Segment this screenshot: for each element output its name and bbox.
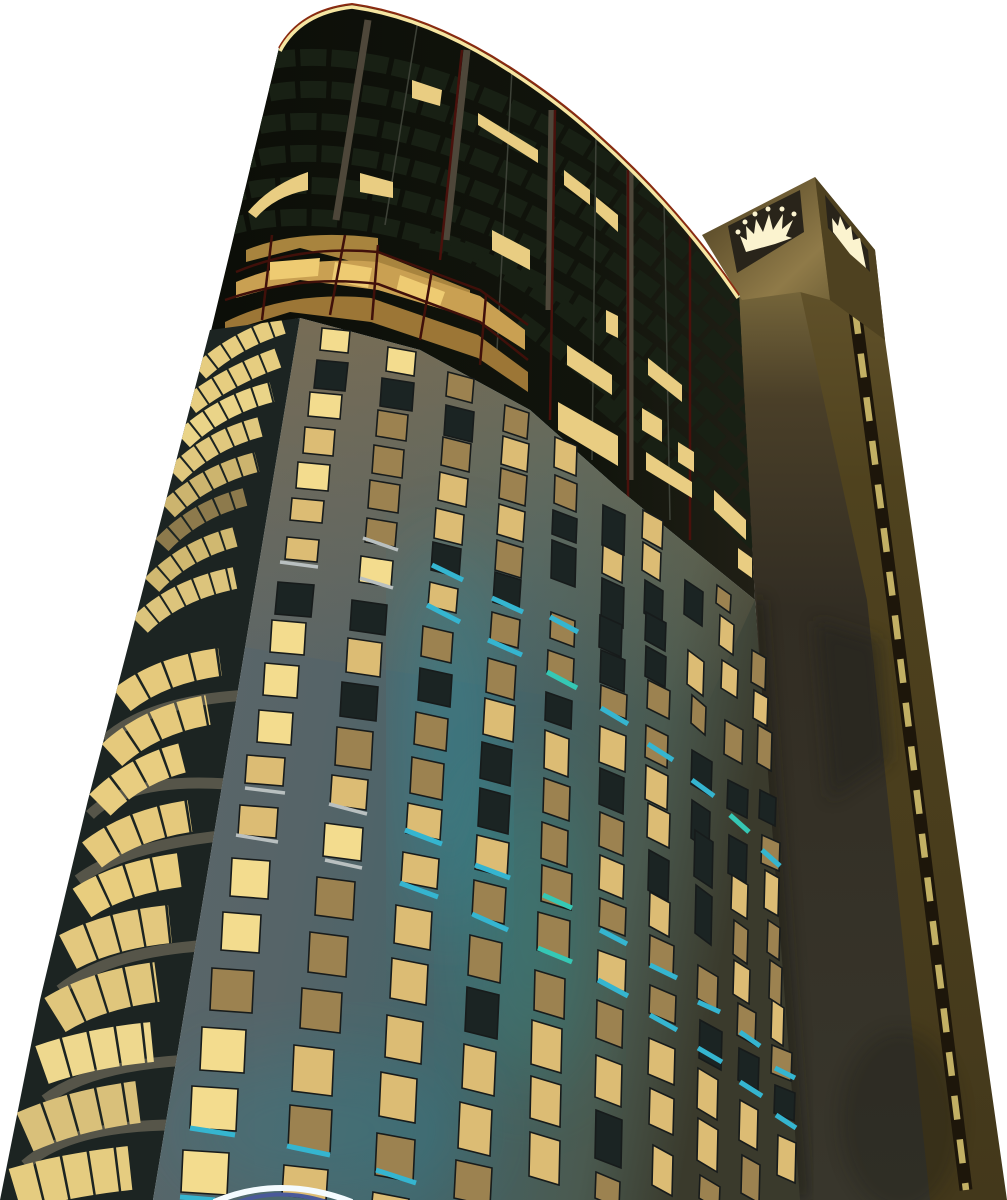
window column A bbox=[181, 328, 350, 1195]
window column F bbox=[595, 505, 627, 1200]
icon: crown logo front bbox=[736, 206, 796, 252]
window column E bbox=[529, 437, 577, 1185]
main facade bbox=[153, 318, 800, 1200]
lit rooms in upper section bbox=[248, 80, 752, 578]
window column C bbox=[372, 372, 474, 1200]
curved left wing: lit window bands, lower bbox=[15, 662, 220, 1190]
window column D bbox=[454, 405, 529, 1200]
teal lit ledges bbox=[180, 565, 796, 1200]
icon: crown logo side bbox=[832, 216, 866, 268]
window column J bbox=[751, 650, 796, 1183]
curved left wing: base bbox=[0, 318, 300, 1200]
window column B bbox=[282, 347, 416, 1200]
upper dark curved section bbox=[210, 4, 760, 600]
canopy light at base bbox=[214, 1188, 352, 1200]
window column H bbox=[684, 580, 722, 1200]
curved left wing: lit window bands, upper bbox=[140, 325, 283, 625]
pale window ledges bbox=[236, 538, 398, 868]
service tower: body bbox=[738, 177, 1007, 1200]
roof neon line bbox=[279, 4, 739, 298]
window column G bbox=[642, 510, 676, 1196]
warm lit floors bbox=[225, 235, 528, 392]
window column I bbox=[716, 585, 760, 1200]
service tower: crown faces bbox=[702, 177, 885, 340]
service tower: vertical window strip bbox=[855, 310, 966, 1190]
